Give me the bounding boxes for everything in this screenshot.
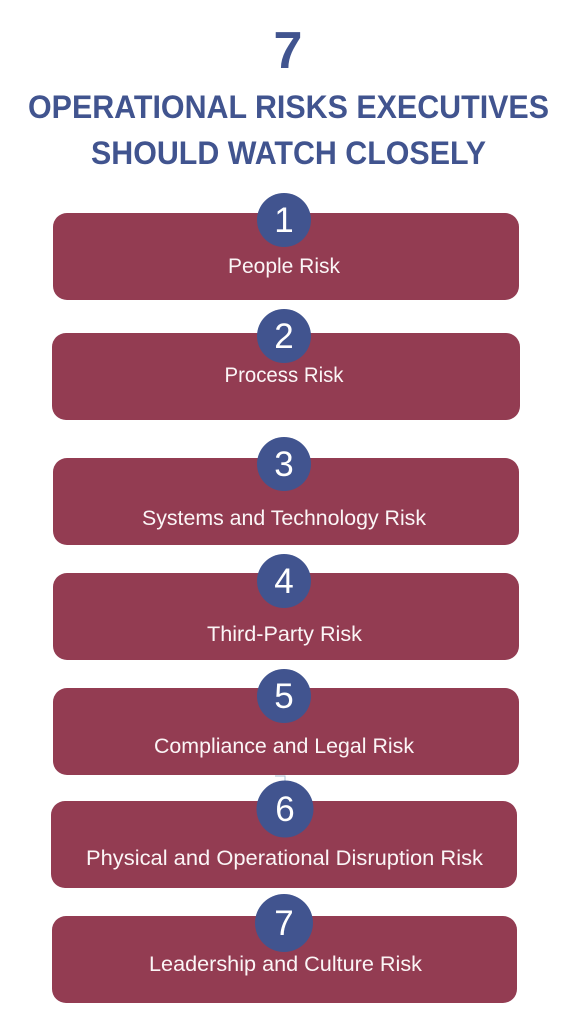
label: process risk: Process Risk [224, 364, 344, 387]
number badge 7 [255, 894, 313, 952]
number badge 7: 7 [274, 904, 294, 943]
panel: third-party risk [53, 554, 519, 660]
title line 2: SHOULD WATCH CLOSELY [91, 135, 486, 171]
panel: physical and operational disruption risk [51, 780, 517, 888]
label: compliance and legal risk: Compliance and Legal Risk [154, 735, 415, 758]
panel: leadership and culture risk [52, 894, 517, 1003]
number badge 6: 6 [275, 790, 295, 829]
title line 1: OPERATIONAL RISKS EXECUTIVES [28, 89, 549, 125]
panel: people risk [53, 193, 519, 300]
panel: process risk [52, 309, 520, 420]
number badge 4 [257, 554, 311, 608]
number badge 1: 1 [274, 201, 294, 240]
title [28, 22, 549, 171]
title number: 7 [274, 22, 302, 80]
number badge 3: 3 [274, 445, 294, 484]
label: systems and technology risk: Systems and Technology Risk [142, 507, 427, 530]
label: physical and operational disruption risk: Physical and Operational Disruption Risk [86, 847, 484, 870]
number badge 4: 4 [274, 562, 294, 601]
number badge 5 [257, 669, 311, 723]
label: people risk: People Risk [228, 255, 340, 278]
label: third-party risk: Third-Party Risk [207, 623, 363, 646]
number badge 5: 5 [274, 677, 294, 716]
label: leadership and culture risk: Leadership and Culture Risk [149, 953, 423, 976]
number badge 1 [257, 193, 311, 247]
number badge 6 [256, 780, 314, 838]
number badge 2 [257, 309, 311, 363]
number badge 2: 2 [274, 317, 294, 356]
number badge 3 [257, 437, 311, 491]
panel: systems and technology risk [53, 437, 519, 545]
panel: compliance and legal risk [53, 669, 519, 775]
